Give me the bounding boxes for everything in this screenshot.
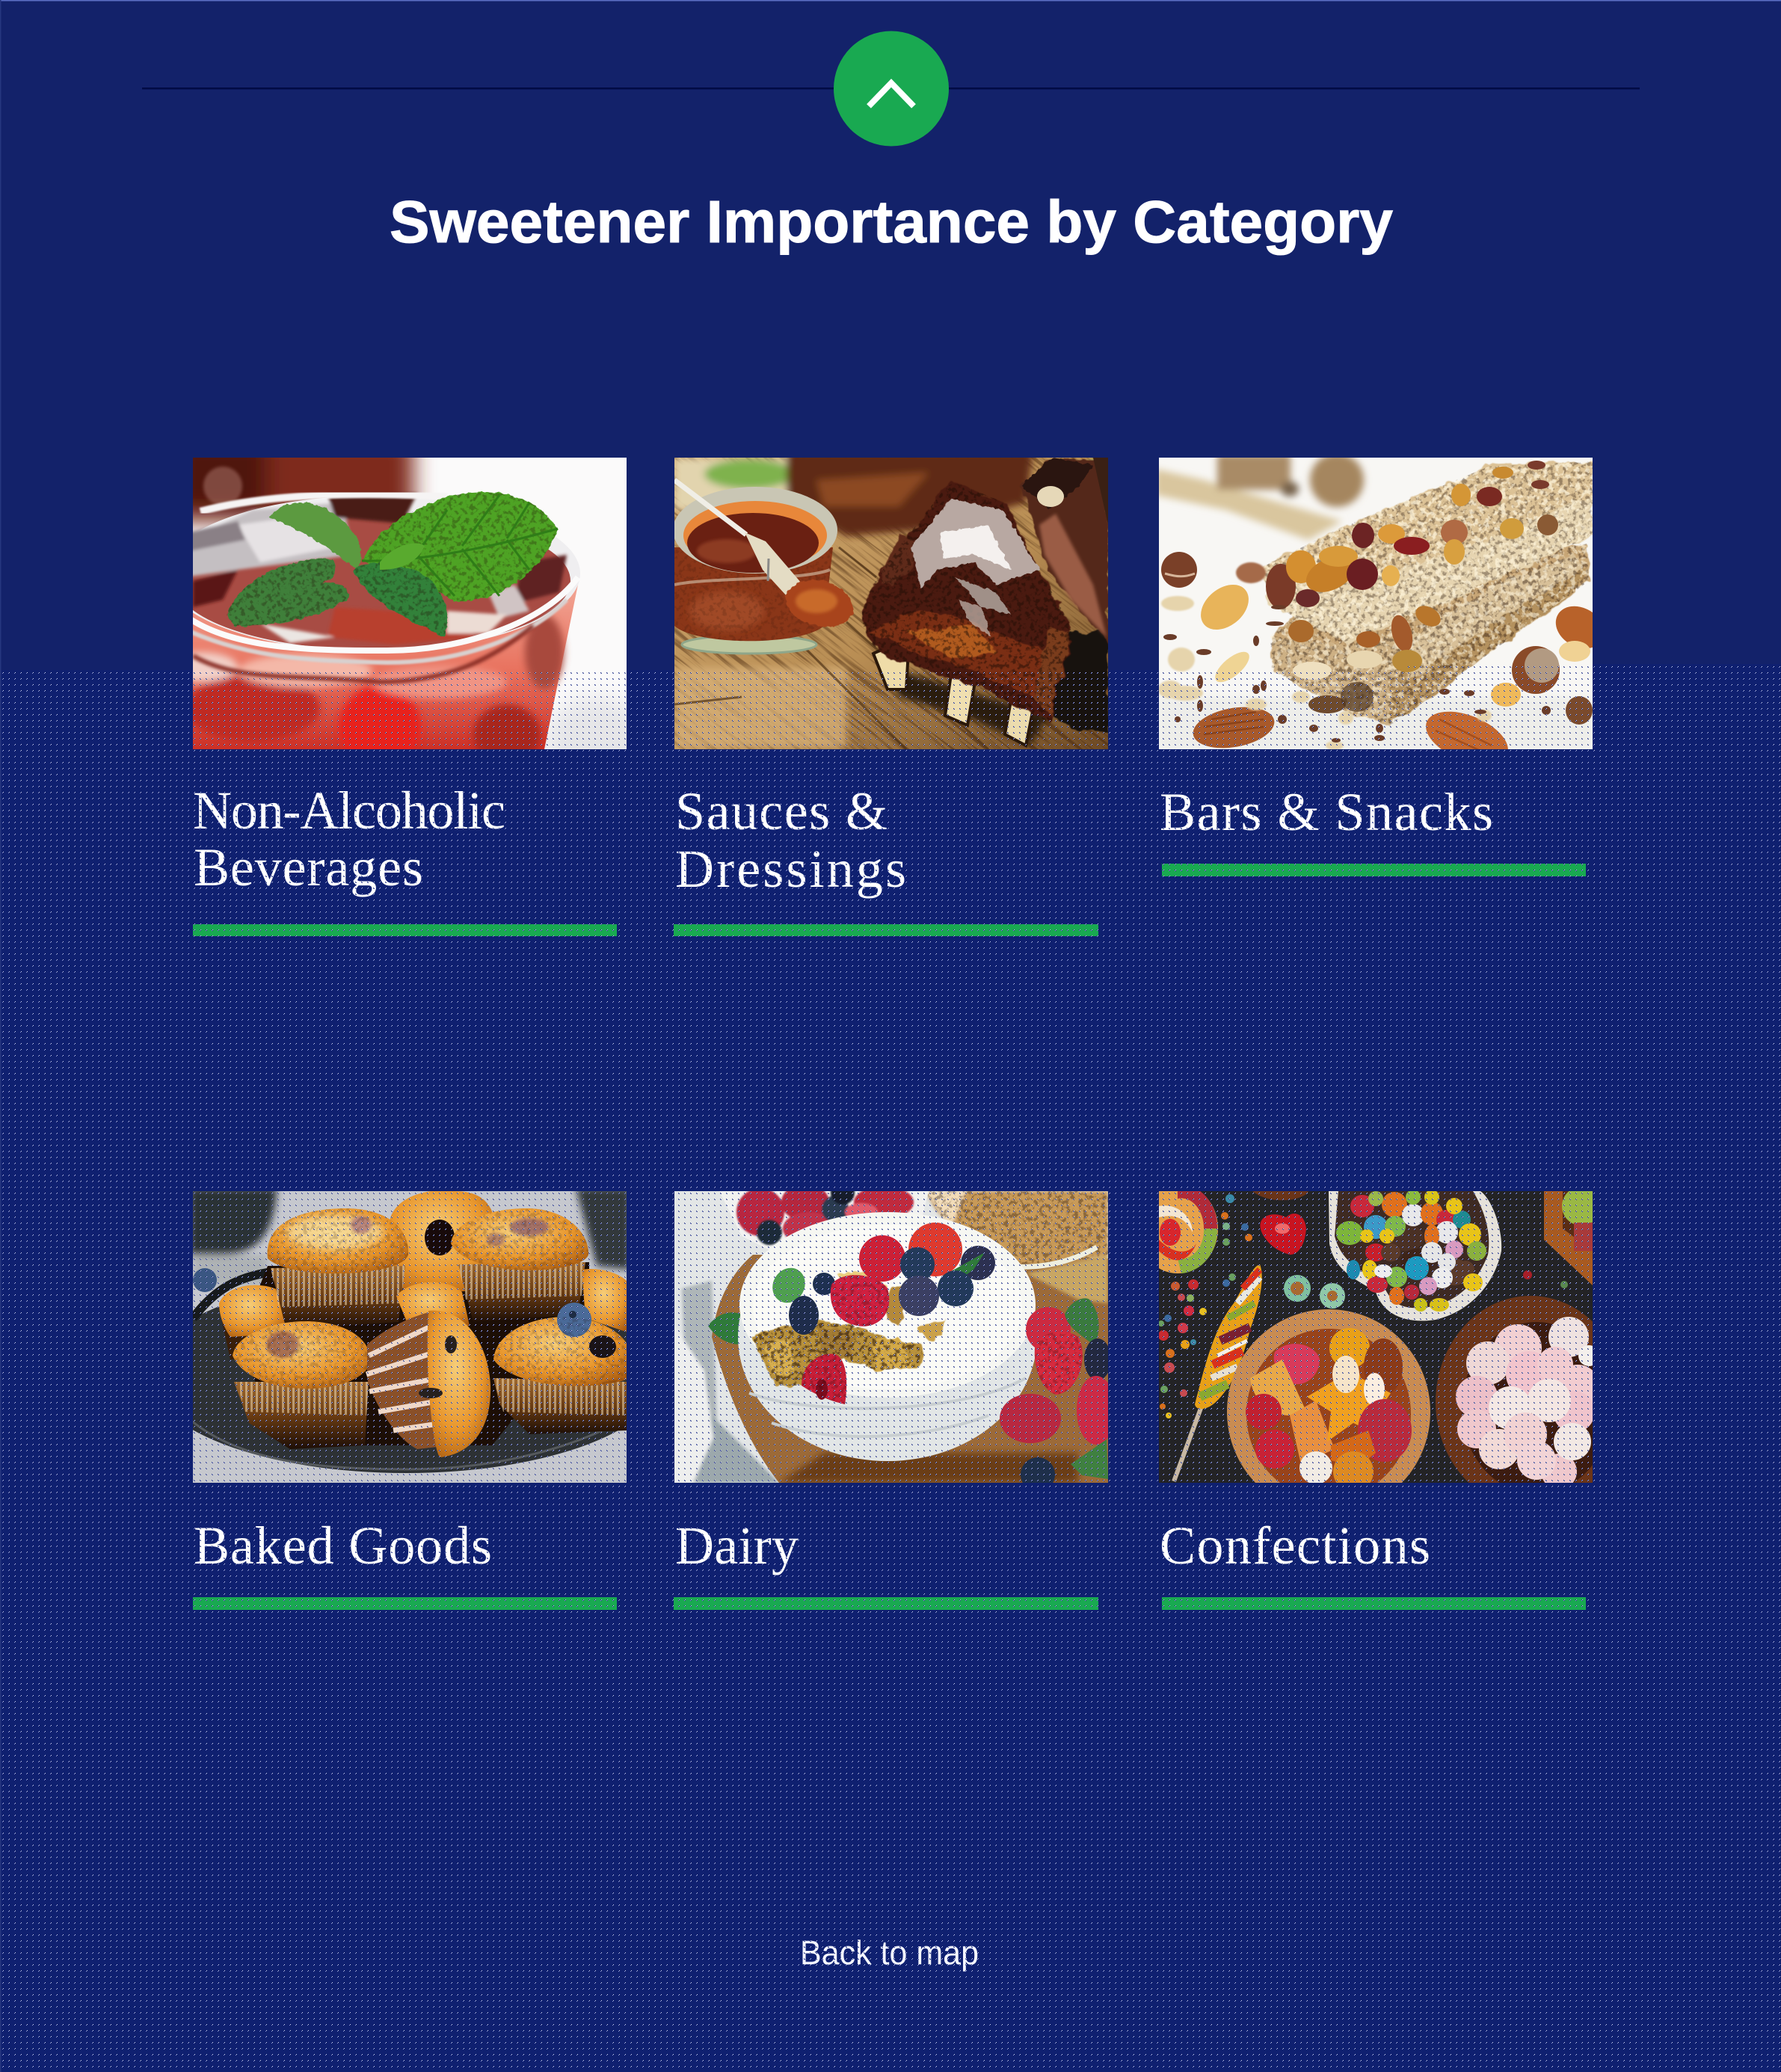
green underline [1162, 864, 1586, 876]
photo: red iced drink with mint [193, 458, 627, 749]
label: Non-Alcoholic Beverages: Beverages [194, 837, 423, 897]
label: Sauces & Dressings: Sauces & [675, 781, 888, 841]
green underline [674, 924, 1098, 936]
label: Bars & Snacks: Bars & Snacks [1160, 782, 1493, 842]
label: Non-Alcoholic Beverages: Non-Alcoholic [193, 781, 505, 840]
label: Non-Alcoholic Beverages [193, 781, 505, 897]
card: Non-Alcoholic Beverages [193, 458, 627, 936]
green underline [193, 1597, 617, 1610]
green underline [674, 1597, 1098, 1610]
photo: granola bars and nuts [1159, 458, 1593, 749]
green underline [1162, 1597, 1586, 1610]
photo: candy bowls on dark slate [1159, 1191, 1593, 1483]
label: Dairy: Dairy [675, 1516, 799, 1575]
card: Baked Goods [193, 1191, 627, 1610]
divider line with top button [142, 31, 1640, 147]
label: Confections: Confections [1160, 1516, 1430, 1575]
card: Dairy [674, 1181, 1116, 1610]
back to map link: Back to map [800, 1934, 979, 1972]
label: Sauces & Dressings: Dressings [675, 839, 906, 899]
label: Sauces & Dressings [675, 781, 906, 899]
label: Baked Goods: Baked Goods [194, 1516, 492, 1575]
card: Sauces & Dressings [674, 458, 1108, 936]
icon: green circle up chevron button [834, 31, 949, 147]
title: Sweetener Importance by Category [390, 188, 1394, 255]
card: Bars & Snacks [1155, 453, 1611, 876]
card: Confections [1159, 1191, 1593, 1610]
green underline [193, 924, 617, 936]
photo: blueberry muffins on plate [193, 1191, 627, 1483]
photo: yogurt bowl with berries and granola [674, 1181, 1116, 1492]
photo: glazed ribs with sauce jar [674, 458, 1108, 749]
